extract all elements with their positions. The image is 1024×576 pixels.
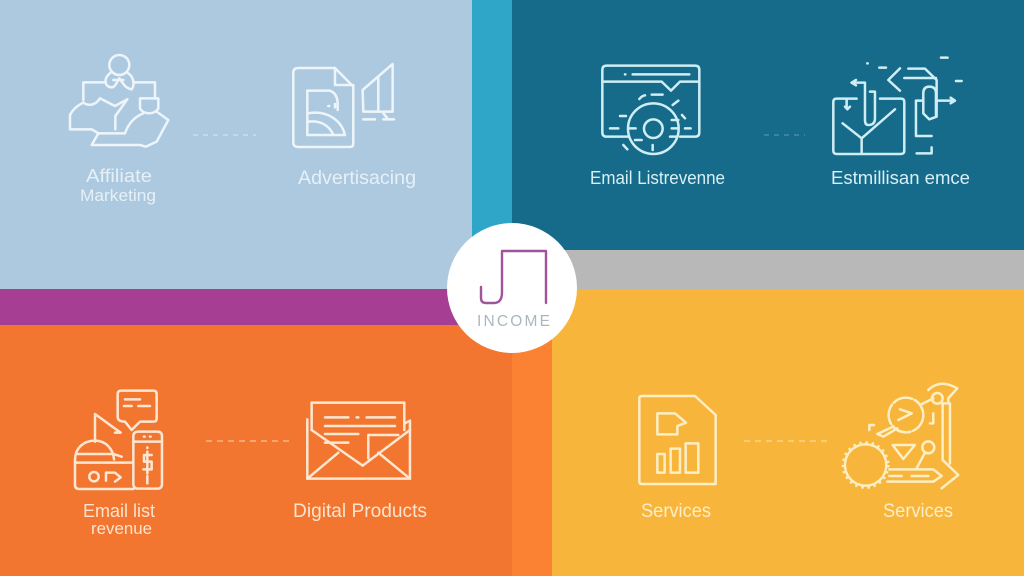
- icon: chat, burger and phone: [75, 391, 162, 489]
- label: email list revenue: [83, 501, 155, 538]
- icon: browser window with dial: [602, 66, 699, 154]
- label: email list revenue: revenue: [91, 519, 152, 538]
- label: affiliate marketing: Affiliate: [86, 166, 152, 186]
- icon: gear and tools: [843, 384, 958, 488]
- label: income: INCOME: [477, 313, 550, 330]
- label: affiliate marketing: Marketing: [80, 187, 156, 205]
- center badge: income: [447, 223, 577, 353]
- icon: document and monitor: [293, 64, 394, 147]
- panel: services gears: [843, 384, 958, 522]
- panel: services chart: [639, 396, 716, 522]
- label: affiliate marketing: [80, 166, 156, 205]
- panel: digital products: [293, 403, 427, 522]
- panel: email list: [590, 66, 725, 188]
- label: services: Services: [883, 500, 953, 522]
- label: estimation: Estmillisan emce: [831, 167, 970, 188]
- label: email list revenue: Email list: [83, 501, 155, 521]
- panel: advertising: [293, 64, 416, 189]
- label: digital products: Digital Products: [293, 500, 427, 522]
- label: services: Services: [641, 500, 711, 522]
- icon: affiliate people: [70, 55, 168, 147]
- icon: income logo mark: [481, 251, 546, 303]
- icon: envelope with arrows: [833, 58, 962, 154]
- panel: email list revenue: [75, 391, 162, 538]
- label: advertising: Advertisacing: [298, 167, 416, 189]
- icon: open envelope with letter: [307, 403, 410, 479]
- label: email list revenue: Email Listrevenne: [590, 167, 725, 188]
- panel: affiliate marketing: [70, 55, 168, 205]
- panel: estimation: [831, 58, 970, 188]
- icon: document with bar chart: [639, 396, 716, 484]
